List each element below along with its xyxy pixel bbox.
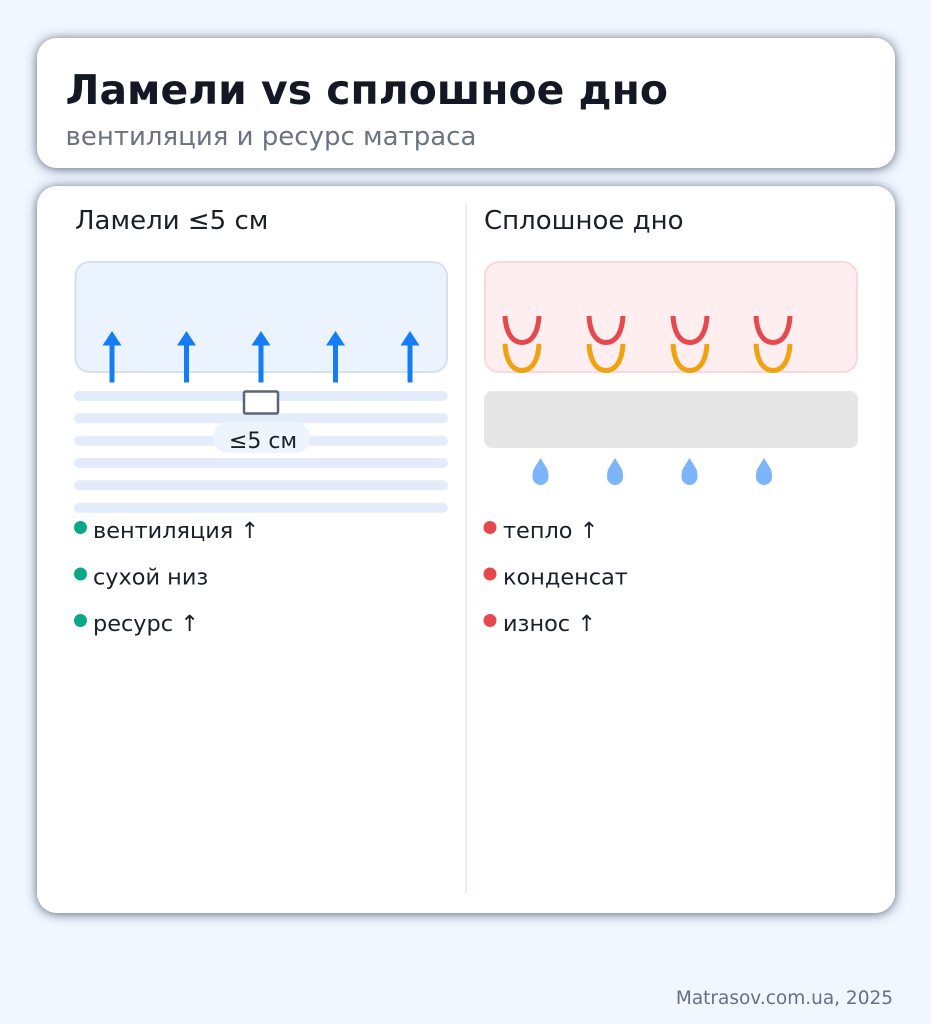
drawbacks list: тепло ↑	[503, 518, 598, 544]
subtitle: вентиляция и ресурс матраса	[66, 122, 476, 152]
title: Ламели vs сплошное дно	[66, 66, 668, 114]
drawbacks list: конденсат	[503, 564, 628, 590]
drawbacks list: износ ↑	[503, 611, 596, 637]
moisture curves	[505, 344, 790, 370]
heat curves	[505, 316, 790, 342]
slats	[74, 391, 448, 513]
heading: slats: Ламели ≤5 см	[75, 206, 268, 236]
mattress on solid base	[485, 262, 857, 372]
airflow arrows	[102, 331, 420, 382]
gap label: ≤5 см	[229, 429, 297, 454]
footer credit: Matrasov.com.ua, 2025	[676, 988, 893, 1009]
gap label	[213, 422, 310, 454]
gap marker	[244, 392, 278, 414]
solid base	[484, 391, 858, 448]
panel: comparison card	[37, 186, 895, 913]
condensate drops	[532, 458, 772, 485]
drawbacks list	[484, 518, 628, 637]
benefits list: вентиляция ↑	[93, 518, 259, 544]
mattress on slats	[76, 262, 447, 372]
heading: solid base: Сплошное дно	[484, 206, 684, 236]
column: slats	[74, 206, 448, 637]
benefits list: сухой низ	[93, 564, 208, 590]
benefits list	[74, 518, 259, 637]
panel: header card	[37, 38, 895, 168]
benefits list: ресурс ↑	[93, 611, 199, 637]
column: solid base	[484, 206, 858, 637]
